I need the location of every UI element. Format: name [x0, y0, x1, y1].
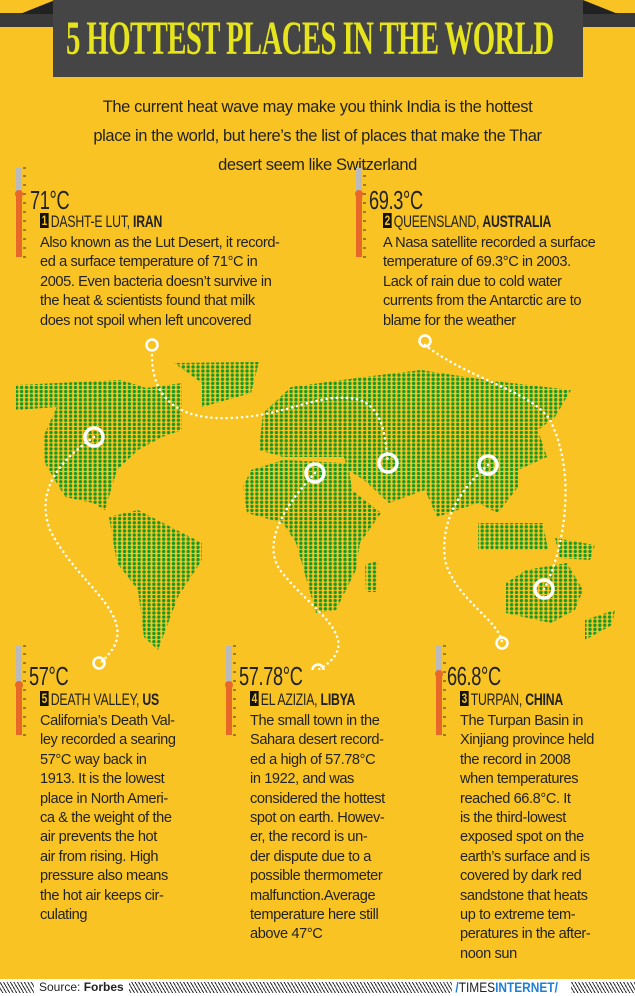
panel: El Azizia: above 47°C — [250, 926, 322, 942]
panel: Turpan: 3 — [462, 690, 467, 706]
panel: El Azizia — [225, 646, 386, 942]
panel: Dasht-e Lut: 71°C — [30, 185, 69, 215]
panel: Death Valley: DEATH VALLEY, US — [51, 690, 159, 709]
panel: Turpan: TURPAN, CHINA — [471, 690, 563, 709]
panel: El Azizia: 57.78°C — [239, 661, 303, 691]
panel: Queensland: 2 — [385, 212, 390, 228]
panel: Dasht-e Lut: ed a surface temperature of 71°C in — [40, 254, 257, 270]
panel: Dasht-e Lut: does not spoil when left uncovered — [40, 313, 251, 329]
panel: Dasht-e Lut: Also known as the Lut Desert, it record- — [40, 235, 280, 251]
panel: Death Valley: 57°C way back in — [40, 752, 147, 768]
panel: Queensland: A Nasa satellite recorded a surface — [383, 235, 595, 251]
panel: Turpan: is the third-lowest — [460, 810, 566, 826]
panel: El Azizia: in 1922, and was — [250, 771, 354, 787]
logo: Times Internet: /TIMESINTERNET/ — [455, 979, 558, 995]
panel: Queensland: temperature of 69.3°C in 2003. — [383, 254, 571, 270]
marker: USA — [85, 428, 103, 446]
panel: Death Valley: air prevents the hot — [40, 829, 157, 845]
panel: Queensland — [355, 168, 596, 329]
icon: thermometer — [15, 646, 26, 736]
intro text — [93, 98, 542, 174]
marker: Iran — [379, 454, 397, 472]
panel: Turpan: exposed spot on the — [460, 829, 584, 845]
panel: Death Valley: 1913. It is the lowest — [40, 771, 164, 787]
panel: Queensland: blame for the weather — [383, 313, 516, 329]
panel: Turpan: earth’s surface and is — [460, 849, 590, 865]
panel: Turpan: when temperatures — [460, 771, 578, 787]
source: Source: Forbes — [39, 980, 124, 994]
panel: El Azizia: Sahara desert record- — [250, 732, 384, 748]
panel: El Azizia: temperature here still — [250, 907, 378, 923]
panel: Death Valley: pressure also means — [40, 868, 168, 884]
icon: thermometer — [225, 646, 236, 736]
panel: Death Valley: California’s Death Val- — [40, 713, 175, 729]
panel: Death Valley: 57°C — [29, 661, 68, 691]
title: 5 HOTTEST PLACES IN THE WORLD — [66, 12, 554, 65]
panel: El Azizia: 4 — [252, 690, 257, 706]
panel: Dasht-e Lut: DASHT-E LUT, IRAN — [51, 212, 162, 231]
panel: El Azizia: The small town in the — [250, 713, 380, 729]
panel: Death Valley: the hot air keeps cir- — [40, 888, 163, 904]
panel: Death Valley: ca & the weight of the — [40, 810, 172, 826]
panel: El Azizia: malfunction.Average — [250, 888, 375, 904]
panel: Queensland: Lack of rain due to cold water — [383, 274, 562, 290]
panel: El Azizia: ed a high of 57.78°C — [250, 752, 375, 768]
marker: Australia — [535, 580, 553, 598]
footer — [0, 979, 635, 996]
panel: El Azizia: der dispute due to a — [250, 849, 371, 865]
panel: Death Valley: air from rising. High — [40, 849, 158, 865]
panel: Death Valley — [15, 646, 176, 923]
panel: El Azizia: considered the hottest — [250, 791, 385, 807]
panel: Turpan: 66.8°C — [447, 661, 501, 691]
icon: thermometer — [435, 646, 446, 736]
panel: Turpan: peratures in the after- — [460, 926, 590, 942]
panel: Turpan: reached 66.8°C. It — [460, 791, 571, 807]
icon: thermometer — [355, 168, 366, 258]
panel: Death Valley: ley recorded a searing — [40, 732, 176, 748]
panel: Queensland: currents from the Antarctic are to — [383, 293, 581, 309]
intro text: place in the world, but here’s the list of places that make the Thar — [93, 127, 542, 145]
title banner — [0, 0, 635, 77]
panel: El Azizia: possible thermometer — [250, 868, 382, 884]
panel: Dasht-e Lut: the heat & scientists found that milk — [40, 293, 255, 309]
panel: El Azizia: spot on earth. Howev- — [250, 810, 384, 826]
panel: Turpan: Xinjiang province held — [460, 732, 594, 748]
panel: Turpan: sandstone that heats — [460, 888, 588, 904]
panel: Death Valley: culating — [40, 907, 87, 923]
marker: Libya — [306, 464, 324, 482]
intro text: desert seem like Switzerland — [218, 156, 417, 174]
icon: thermometer — [15, 168, 26, 258]
intro text: The current heat wave may make you think India is the hottest — [103, 98, 532, 116]
panel: Turpan: the record in 2008 — [460, 752, 570, 768]
panel: El Azizia: EL AZIZIA, LIBYA — [261, 690, 355, 709]
panel: Dasht-e Lut: 2005. Even bacteria doesn’t survive in — [40, 274, 271, 290]
panel: Death Valley: place in North Ameri- — [40, 791, 168, 807]
panel: Death Valley: 5 — [42, 690, 47, 706]
panel: Dasht-e Lut: 1 — [42, 212, 47, 228]
world map — [16, 334, 615, 670]
panel: Turpan: The Turpan Basin in — [460, 713, 583, 729]
marker: China — [479, 456, 497, 474]
panel: Turpan: covered by dark red — [460, 868, 581, 884]
panel: Turpan — [435, 646, 594, 962]
panel: Turpan: up to extreme tem- — [460, 907, 575, 923]
panel: Turpan: noon sun — [460, 946, 517, 962]
panel: Queensland: QUEENSLAND, AUSTRALIA — [394, 212, 551, 231]
panel: Dasht-e Lut — [15, 168, 280, 329]
panel: El Azizia: er, the record is un- — [250, 829, 367, 845]
panel: Queensland: 69.3°C — [369, 185, 423, 215]
